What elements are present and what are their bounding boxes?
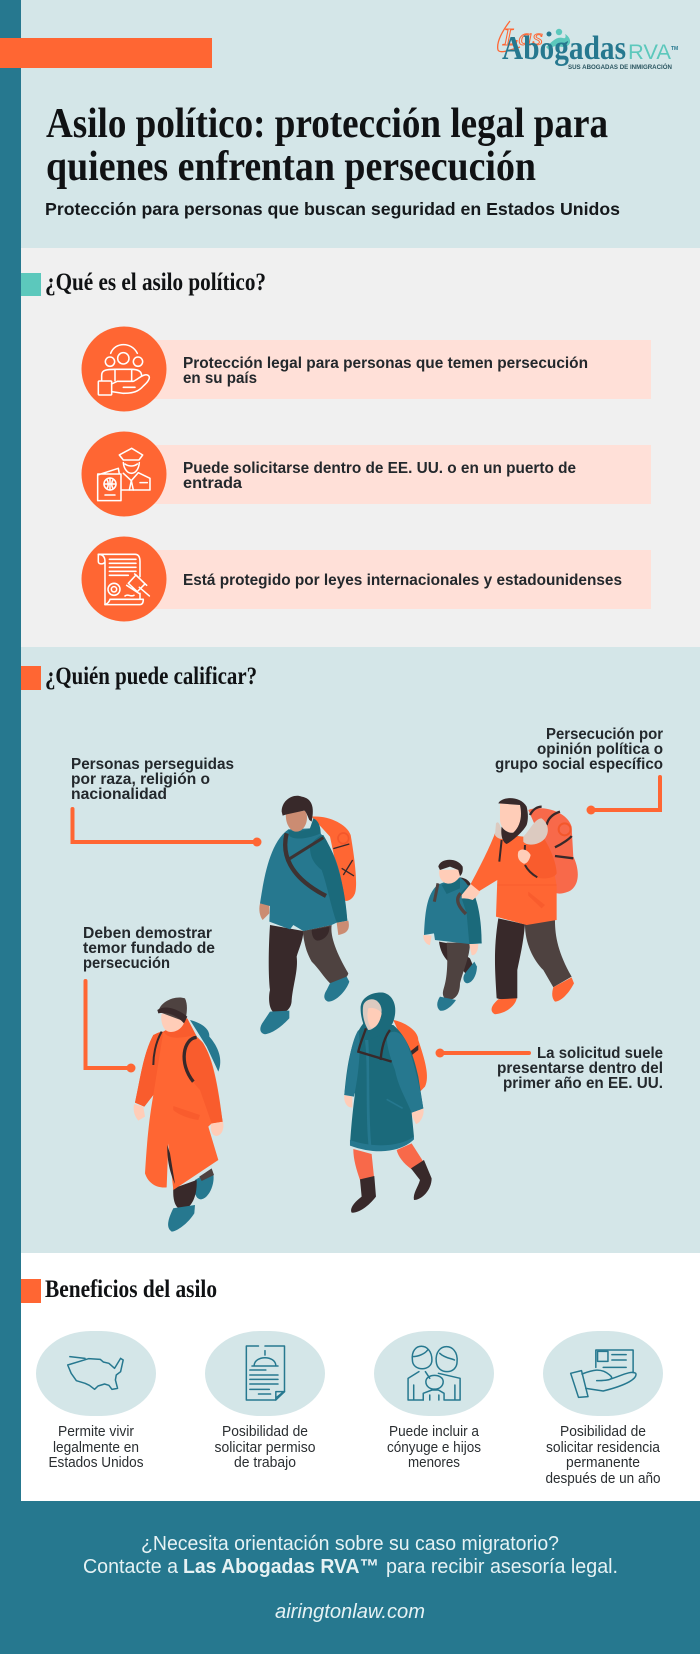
benefit 4: permanent residence	[543, 1331, 663, 1487]
panel: who qualifies background	[21, 647, 700, 1253]
illustration: woman in orange coat	[134, 997, 223, 1232]
icon: map of United States	[68, 1357, 123, 1389]
icon: officer and passport	[98, 448, 150, 501]
footer call to action: ¿Necesita orientación sobre su caso migratorio?	[141, 1533, 559, 1555]
section heading: what is asylum: ¿Qué es el asilo político?	[45, 269, 266, 296]
logo script word: Las	[502, 25, 543, 51]
callout: well-founded fear: temor fundado de	[83, 940, 215, 957]
benefit 2: work permit	[205, 1331, 325, 1471]
item text: entrada	[183, 475, 242, 492]
benefit text: solicitar residencia	[546, 1440, 661, 1456]
benefit text: legalmente en	[53, 1440, 139, 1456]
panel: benefits background	[21, 1253, 700, 1501]
callout: first year deadline: presentarse dentro del	[497, 1060, 663, 1077]
benefit 3: include family	[374, 1331, 494, 1471]
callout: well-founded fear: persecución	[83, 955, 170, 972]
panel: what is asylum background	[21, 248, 700, 647]
callout: first year deadline	[436, 1045, 663, 1092]
item text	[183, 460, 576, 492]
benefit text: menores	[408, 1455, 460, 1471]
footer website: airingtonlaw.com	[275, 1601, 425, 1623]
footer call to action: para recibir asesoría legal.	[386, 1556, 618, 1578]
logo tagline: SUS ABOGADAS DE INMIGRACIÓN	[568, 62, 672, 71]
callout: race, religion, nationality: por raza, religión o	[71, 771, 210, 788]
benefit text	[48, 1424, 144, 1471]
icon: people in a hand	[98, 345, 149, 395]
benefit text: solicitar permiso	[214, 1440, 316, 1456]
illustration: woman in teal coat	[344, 993, 432, 1213]
item 1: legal protection	[82, 326, 651, 412]
title: Asilo político: protección legal para	[46, 101, 608, 147]
callout: political opinion: grupo social específico	[495, 756, 663, 773]
panel: header background	[21, 0, 700, 248]
section heading: who qualifies: ¿Quién puede calificar?	[45, 663, 257, 690]
callout: race, religion, nationality: nacionalidad	[71, 786, 167, 803]
benefit text: Posibilidad de	[560, 1424, 646, 1440]
item text: Puede solicitarse dentro de EE. UU. o en un puerto de	[183, 460, 576, 477]
benefit text: Posibilidad de	[222, 1424, 308, 1440]
logo RVA: RVA	[628, 41, 671, 64]
illustration: man in orange coat	[462, 798, 578, 1014]
callout: political opinion: opinión política o	[537, 741, 663, 758]
orange accent bar	[0, 38, 212, 68]
logo wordmark: Abogadas	[502, 30, 626, 67]
icon: work permit document	[246, 1346, 284, 1400]
callout: first year deadline: primer año en EE. UU.	[503, 1075, 663, 1092]
callout: political opinion	[495, 726, 663, 814]
callout: first year deadline: La solicitud suele	[537, 1045, 663, 1062]
callout: race, religion, nationality	[71, 756, 262, 846]
benefit text: de trabajo	[234, 1455, 296, 1471]
left sidebar	[0, 0, 21, 1654]
icon: legal document and gavel	[98, 554, 149, 605]
icon: hand holding ID card	[571, 1350, 636, 1397]
footer call to action: Contacte a	[83, 1556, 179, 1578]
benefit 1: live legally	[36, 1331, 156, 1471]
icon: family	[408, 1346, 460, 1400]
item text: Protección legal para personas que temen persecución	[183, 355, 588, 372]
callout: race, religion, nationality: Personas perseguidas	[71, 756, 234, 773]
footer band	[0, 1501, 700, 1654]
benefit text	[214, 1424, 316, 1471]
benefit text	[387, 1424, 481, 1471]
callout: political opinion: Persecución por	[546, 726, 663, 743]
benefit text: cónyuge e hijos	[387, 1440, 481, 1456]
footer call to action	[83, 1533, 618, 1578]
benefit text: Permite vivir	[58, 1424, 134, 1440]
item text: en su país	[183, 370, 257, 387]
benefit text: Puede incluir a	[389, 1424, 480, 1440]
item text	[183, 355, 588, 387]
subtitle: Protección para personas que buscan seguridad en Estados Unidos	[45, 199, 620, 219]
callout: well-founded fear	[83, 925, 215, 1072]
benefit text: después de un año	[546, 1471, 660, 1487]
logo trademark: TM	[671, 46, 678, 52]
item text: Está protegido por leyes internacionales y estadounidenses	[183, 572, 622, 589]
title	[46, 101, 608, 190]
logo	[498, 21, 678, 71]
benefit text: permanente	[566, 1455, 640, 1471]
illustration: child with teal jacket	[423, 860, 482, 1011]
section heading: benefits: Beneficios del asilo	[45, 1276, 217, 1303]
logo swoosh	[498, 21, 570, 52]
illustration: man in teal jacket	[259, 796, 356, 1034]
benefit text	[546, 1424, 661, 1487]
item 2: where to apply	[82, 432, 651, 516]
footer call to action: Las Abogadas RVA™	[183, 1556, 379, 1578]
benefit text: Estados Unidos	[48, 1455, 144, 1471]
item 3: protected by law	[82, 536, 651, 622]
title: quienes enfrentan persecución	[46, 144, 536, 190]
callout: well-founded fear: Deben demostrar	[83, 925, 212, 942]
